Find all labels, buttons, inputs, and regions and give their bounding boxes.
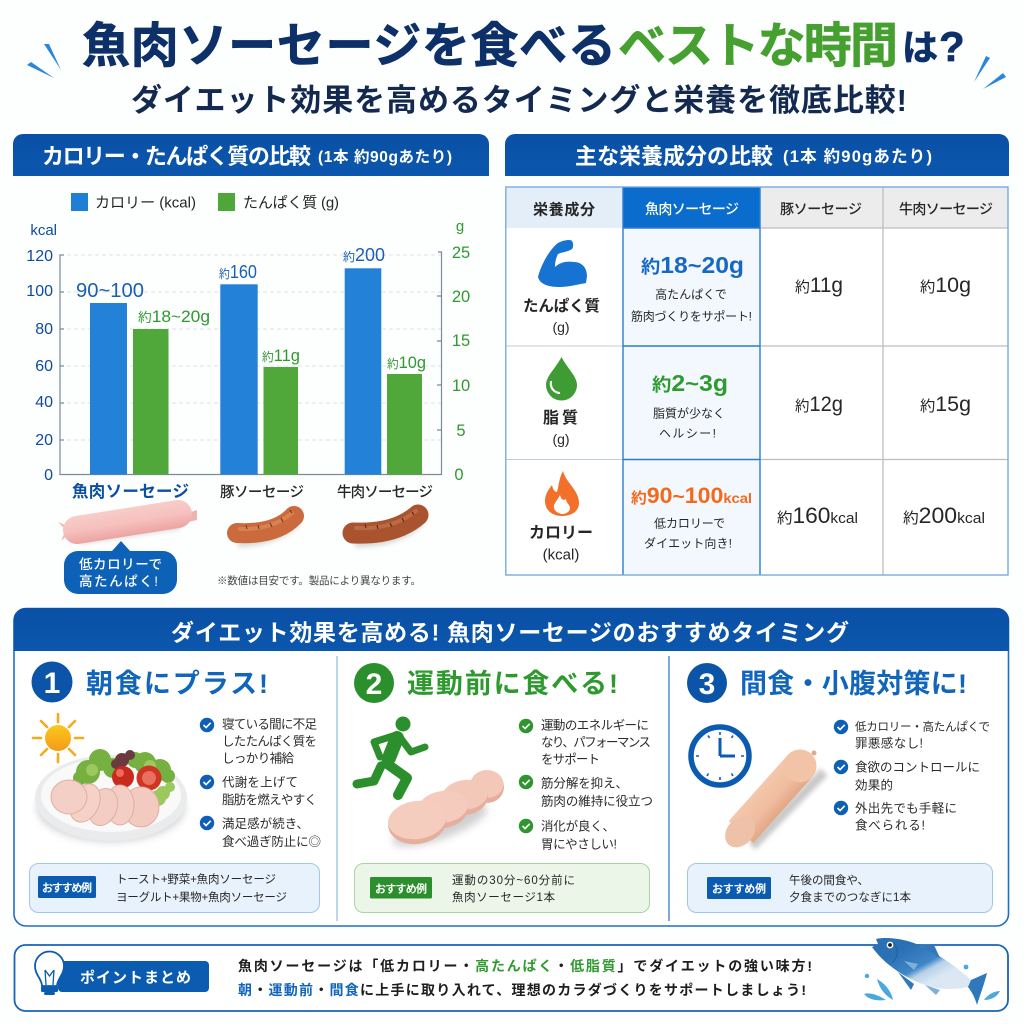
- callout: 高たんぱく!: [79, 573, 158, 589]
- recommendation box 1: トースト+野菜+魚肉ソーセージ: [116, 873, 276, 886]
- benefit list 2: 消化が良く、: [541, 818, 615, 834]
- benefit list 2: なり、パフォーマンス: [541, 736, 651, 750]
- chart legend: たんぱく質 (g): [243, 194, 339, 212]
- icon: flame: [545, 471, 579, 516]
- table header row: [533, 200, 993, 218]
- recommendation box 3: [688, 864, 992, 912]
- category labels: 魚肉ソーセージ: [72, 481, 189, 501]
- table header row: 栄養成分: [533, 200, 595, 218]
- left axis labels: 20: [35, 432, 53, 449]
- table header row: 牛肉ソーセージ: [899, 201, 993, 217]
- panel: nutrient comparison: [505, 134, 1009, 575]
- callout: 低カロリーで: [79, 557, 162, 572]
- row: protein: [523, 240, 971, 335]
- right axis labels: 0: [454, 466, 464, 484]
- left axis labels: 0: [44, 467, 53, 484]
- title: 魚肉ソーセージを食べる: [82, 20, 616, 73]
- panel: summary: [14, 938, 1008, 1011]
- panel heading: timing: [14, 608, 1009, 651]
- right axis labels: 5: [456, 422, 466, 440]
- right axis labels: 20: [452, 288, 470, 306]
- panel heading: nutrients: [505, 134, 1009, 176]
- right axis labels: g: [456, 218, 464, 235]
- row: calories: カロリー: [529, 524, 593, 542]
- panel: calorie and protein comparison: [13, 134, 489, 594]
- illustration: whole fish sausage: [719, 750, 824, 853]
- row: calories: 約160kcal: [777, 503, 858, 528]
- benefit list 3: [834, 720, 990, 832]
- row: fat: (g): [552, 431, 570, 447]
- column 2: before exercise: [354, 663, 653, 912]
- benefit list 2: 胃にやさしい!: [541, 838, 617, 852]
- benefit list 2: [519, 718, 653, 852]
- panel heading: nutrients: (1本 約90gあたり): [783, 147, 932, 166]
- title: ベストな時間: [618, 20, 898, 73]
- recommendation box 1: おすすめ例: [42, 882, 92, 894]
- bars: beef sausage: [345, 268, 422, 474]
- row: fat: 約15g: [920, 393, 971, 416]
- row: calories: 約90~100kcal: [631, 483, 752, 508]
- number badge 3: 3: [699, 668, 715, 701]
- panel heading: calorie and protein: カロリー・たんぱく質の比較: [42, 144, 311, 169]
- number badge 1: 1: [44, 667, 60, 700]
- value labels: [76, 245, 426, 372]
- callout: [64, 541, 177, 594]
- heading: before exercise: 運動前に食べる!: [407, 669, 618, 699]
- row: protein: 高たんぱくで: [655, 288, 727, 302]
- icon: clock: [691, 727, 749, 785]
- value labels: 90~100: [76, 280, 144, 302]
- table header row: 魚肉ソーセージ: [645, 201, 739, 217]
- illustration: beef sausage: [353, 511, 422, 544]
- row: fat: 約12g: [795, 393, 843, 416]
- title: は: [902, 27, 938, 68]
- right axis labels: 15: [452, 332, 470, 350]
- panel heading: calorie and protein: (1本 約90gあたり): [318, 148, 452, 166]
- recommendation box 2: 魚肉ソーセージ1本: [452, 890, 556, 904]
- subtitle: ダイエット効果を高めるタイミングと栄養を徹底比較!: [131, 83, 907, 118]
- row: protein: 約10g: [920, 274, 971, 297]
- value labels: 約200: [343, 245, 385, 265]
- right axis labels: [452, 218, 470, 484]
- benefit list 1: したたんぱく質を: [222, 734, 317, 748]
- benefit list 3: 効果的: [855, 778, 893, 792]
- panel: recommended timing: [14, 608, 1009, 926]
- summary text: [238, 958, 812, 998]
- column 1: breakfast: [30, 662, 321, 912]
- bar chart: [26, 218, 470, 501]
- row: protein: 約11g: [795, 274, 843, 297]
- bars: fish sausage: [90, 303, 168, 474]
- category labels: 豚ソーセージ: [220, 484, 304, 501]
- icon: runner: [357, 716, 425, 795]
- bars: pork sausage: [220, 284, 298, 474]
- value labels: 約10g: [387, 353, 426, 372]
- recommendation box 3: 夕食までのつなぎに1本: [789, 890, 912, 904]
- icon: sun: [33, 714, 83, 762]
- category labels: [72, 481, 433, 501]
- row: fat: ヘルシー!: [659, 426, 716, 440]
- recommendation box 1: [30, 864, 320, 912]
- illustration: pork sausage: [237, 510, 298, 544]
- row: calories: [529, 471, 985, 564]
- summary tag: [58, 961, 209, 992]
- benefit list 1: [200, 718, 321, 849]
- number badge 1: [32, 662, 72, 702]
- recommendation box 2: おすすめ例: [375, 882, 427, 896]
- illustration: jumping fish: [864, 938, 1000, 1005]
- number badge 3: [687, 663, 727, 703]
- row: fat: 約2~3g: [652, 370, 728, 396]
- comparison table: [506, 187, 1008, 575]
- heading: breakfast: 朝食にプラス!: [86, 669, 268, 699]
- benefit list 1: 脂肪を燃えやすく: [222, 792, 317, 807]
- illustration: sausage slices: [385, 770, 504, 855]
- benefit list 3: 食欲のコントロールに: [855, 760, 980, 774]
- decorative rays left: [27, 44, 61, 78]
- left axis labels: 40: [35, 394, 53, 411]
- benefit list 3: 罪悪感なし!: [855, 736, 923, 750]
- row: calories: 約200kcal: [903, 503, 985, 528]
- panel heading: timing: ダイエット効果を高める! 魚肉ソーセージのおすすめタイミング: [171, 620, 849, 646]
- benefit list 1: しっかり補給: [222, 752, 294, 766]
- panel heading: nutrients: 主な栄養成分の比較: [575, 144, 773, 169]
- benefit list 1: 寝ている間に不足: [222, 718, 317, 732]
- chart legend: [71, 193, 339, 212]
- number badge 2: 2: [366, 668, 382, 701]
- left axis labels: 100: [26, 283, 53, 300]
- icon: flexed bicep: [538, 240, 587, 287]
- row: protein: たんぱく質: [523, 297, 600, 315]
- benefit list 3: 低カロリー・高たんぱくで: [855, 720, 990, 734]
- left axis labels: [26, 222, 57, 484]
- heading: snack: 間食・小腹対策に!: [740, 669, 967, 699]
- row: fat: 脂 質: [543, 409, 578, 427]
- right axis labels: 10: [452, 377, 470, 395]
- benefit list 2: 筋分解を抑え、: [541, 776, 628, 790]
- left axis labels: 60: [35, 358, 53, 375]
- value labels: 約11g: [262, 346, 300, 365]
- left axis labels: 120: [26, 248, 53, 265]
- right axis labels: 25: [452, 244, 470, 262]
- recommendation box 3: おすすめ例: [712, 882, 766, 896]
- summary text: 魚肉ソーセージは「低カロリー・高たんぱく・低脂質」でダイエットの強い味方!: [238, 958, 812, 974]
- summary text: 朝・運動前・間食に上手に取り入れて、理想のカラダづくりをサポートしましょう!: [238, 982, 806, 998]
- title: [82, 20, 965, 73]
- benefit list 1: 満足感が続き、: [222, 816, 309, 831]
- benefit list 1: 代謝を上げて: [222, 776, 298, 790]
- category labels: 牛肉ソーセージ: [337, 484, 433, 501]
- recommendation box 3: 午後の間食や、: [789, 873, 869, 887]
- benefit list 3: 外出先でも手軽に: [855, 802, 957, 816]
- decorative rays right: [974, 56, 1006, 89]
- value labels: 約18~20g: [138, 308, 210, 326]
- illustration: plate of sliced sausage and salad: [35, 749, 187, 842]
- benefit list 2: 筋肉の維持に役立つ: [541, 794, 653, 808]
- recommendation box 1: ヨーグルト+果物+魚肉ソーセージ: [116, 890, 287, 904]
- benefit list 2: 運動のエネルギーに: [541, 718, 649, 732]
- column 3: snack: [687, 663, 992, 912]
- icon: light bulb: [35, 952, 64, 995]
- chart legend: カロリー (kcal): [95, 194, 196, 212]
- footnote: ※数値は目安です。製品により異なります。: [217, 574, 421, 587]
- benefit list 2: をサポート: [541, 752, 600, 766]
- left axis labels: 80: [35, 321, 53, 338]
- summary tag: ポイントまとめ: [80, 970, 191, 986]
- row: protein: 筋肉づくりをサポート!: [631, 308, 752, 324]
- row: calories: 低カロリーで: [654, 516, 725, 530]
- icon: oil drop: [546, 357, 577, 400]
- benefit list 3: 食べられる!: [855, 818, 925, 832]
- row: fat: 脂質が少なく: [653, 406, 725, 420]
- number badge 2: [354, 663, 394, 703]
- row: calories: ダイエット向き!: [644, 536, 732, 550]
- title: ?: [939, 23, 965, 70]
- recommendation box 2: [354, 864, 650, 912]
- row: calories: (kcal): [543, 546, 579, 564]
- row: protein: 約18~20g: [641, 252, 744, 278]
- value labels: 約160: [219, 262, 257, 282]
- benefit list 1: 食べ過ぎ防止に◎: [222, 834, 321, 849]
- panel heading: calorie and protein: [13, 134, 489, 176]
- row: fat: [543, 357, 971, 447]
- left axis labels: kcal: [30, 222, 57, 239]
- table header row: 豚ソーセージ: [780, 201, 862, 217]
- row: protein: (g): [552, 319, 570, 335]
- recommendation box 2: 運動の30分~60分前に: [452, 873, 575, 887]
- illustration: fish sausage: [58, 510, 197, 541]
